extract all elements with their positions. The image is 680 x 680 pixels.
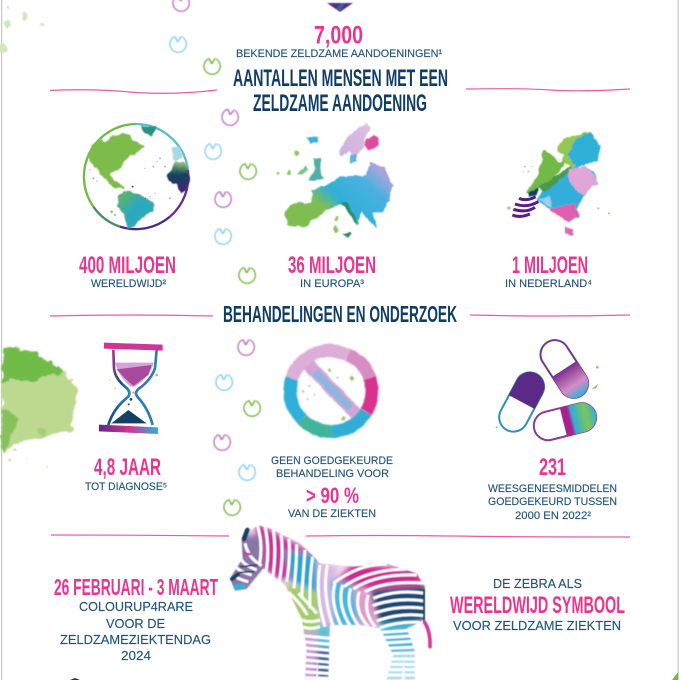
zebra head details xyxy=(232,530,257,587)
icon: globe xyxy=(83,124,189,229)
heading: number of people: ZELDZAME AANDOENING xyxy=(253,90,427,117)
capsule: upper xyxy=(535,334,594,404)
text: Colourup4Rare campaign: 2024 xyxy=(121,648,151,663)
text: no approved treatment: > 90 % xyxy=(306,483,359,508)
statistic: 231 orphan drugs: 231 xyxy=(539,454,566,481)
statistic: 36 million xyxy=(288,252,376,290)
statistic: 7,000 rare conditions xyxy=(236,22,442,60)
text: Colourup4Rare campaign: 26 FEBRUARI - 3 MAART xyxy=(54,574,218,600)
continent: North America xyxy=(89,134,143,187)
bottom edge mark xyxy=(70,678,80,680)
continent: South America xyxy=(118,191,154,229)
zebra tail xyxy=(424,590,430,647)
text: zebra as worldwide symbol xyxy=(450,576,625,633)
icon: hourglass xyxy=(99,343,163,434)
paint splash: top left xyxy=(0,6,44,53)
globe outline xyxy=(84,124,188,229)
text: no approved treatment: BEHANDELING VOOR xyxy=(276,468,389,480)
statistic: 231 orphan drugs: GOEDGEKEURD TUSSEN xyxy=(488,496,617,508)
statistic: 4.8 years: TOT DIAGNOSE⁵ xyxy=(85,481,167,493)
statistic: 4.8 years xyxy=(85,454,167,493)
footprints trail xyxy=(170,0,260,515)
text: Colourup4Rare campaign: VOOR DE xyxy=(106,616,165,631)
zebra colour regions xyxy=(227,522,427,680)
heading: number of people: AANTALLEN MENSEN MET EEN xyxy=(233,65,448,92)
statistic: 1 million: 1 MILJOEN xyxy=(512,252,588,279)
continent: Africa xyxy=(167,162,189,193)
text: zebra as worldwide symbol: VOOR ZELDZAME ZIEKTEN xyxy=(453,618,621,633)
page edge left xyxy=(1,0,2,680)
page edge right xyxy=(678,0,679,680)
statistic: 231 orphan drugs: 2000 EN 2022² xyxy=(515,510,591,522)
statistic: 36 million: IN EUROPA³ xyxy=(300,278,364,290)
heading: treatments and research: BEHANDELINGEN EN ONDERZOEK xyxy=(223,301,457,327)
capsule: left xyxy=(494,367,550,437)
text: no approved treatment: VAN DE ZIEKTEN xyxy=(288,508,376,520)
continent: Greenland xyxy=(141,125,157,138)
statistic: 231 orphan drugs: WEESGENEESMIDDELEN xyxy=(488,483,617,495)
statistic: 400 million: WERELDWIJD² xyxy=(91,278,166,290)
icon: capsules xyxy=(494,334,600,444)
paint splash: bottom right corner xyxy=(672,672,678,680)
illustration: zebra xyxy=(229,525,433,680)
Ireland xyxy=(297,166,309,174)
statistic: 1 million: IN NEDERLAND⁴ xyxy=(505,278,592,290)
United Kingdom xyxy=(308,158,323,181)
text: zebra as worldwide symbol: DE ZEBRA ALS xyxy=(493,576,582,591)
statistic: 400 million xyxy=(79,252,176,290)
statistic: 4.8 years: 4,8 JAAR xyxy=(94,454,161,481)
statistic: 7,000 rare conditions: BEKENDE ZELDZAME AANDOENINGEN¹ xyxy=(236,48,442,60)
icon: map of the Netherlands xyxy=(507,133,610,235)
text: no approved treatment: GEEN GOEDGEKEURDE xyxy=(271,455,393,467)
paint splash: green left xyxy=(2,348,78,469)
statistic: 231 orphan drugs xyxy=(488,454,617,522)
Iceland xyxy=(307,137,318,144)
text: Colourup4Rare campaign: ZELDZAMEZIEKTENDAG xyxy=(60,632,211,647)
Scandinavia xyxy=(339,123,372,157)
statistic: 7,000 rare conditions: 7,000 xyxy=(314,22,363,50)
statistic: 400 million: 400 MILJOEN xyxy=(79,252,176,279)
icon: prohibition sign xyxy=(290,351,372,432)
zebra white stripes xyxy=(234,525,425,678)
capsule: lower xyxy=(531,400,600,444)
statistic: 1 million xyxy=(505,252,592,290)
heading: number of people xyxy=(233,65,448,117)
text: Colourup4Rare campaign: COLOURUP4RARE xyxy=(79,599,193,614)
statistic: 36 million: 36 MILJOEN xyxy=(288,252,376,279)
text: no approved treatment xyxy=(271,455,393,520)
icon: map of Europe xyxy=(277,123,392,238)
icon: top triangle xyxy=(327,3,353,12)
text: Colourup4Rare campaign xyxy=(54,574,218,663)
